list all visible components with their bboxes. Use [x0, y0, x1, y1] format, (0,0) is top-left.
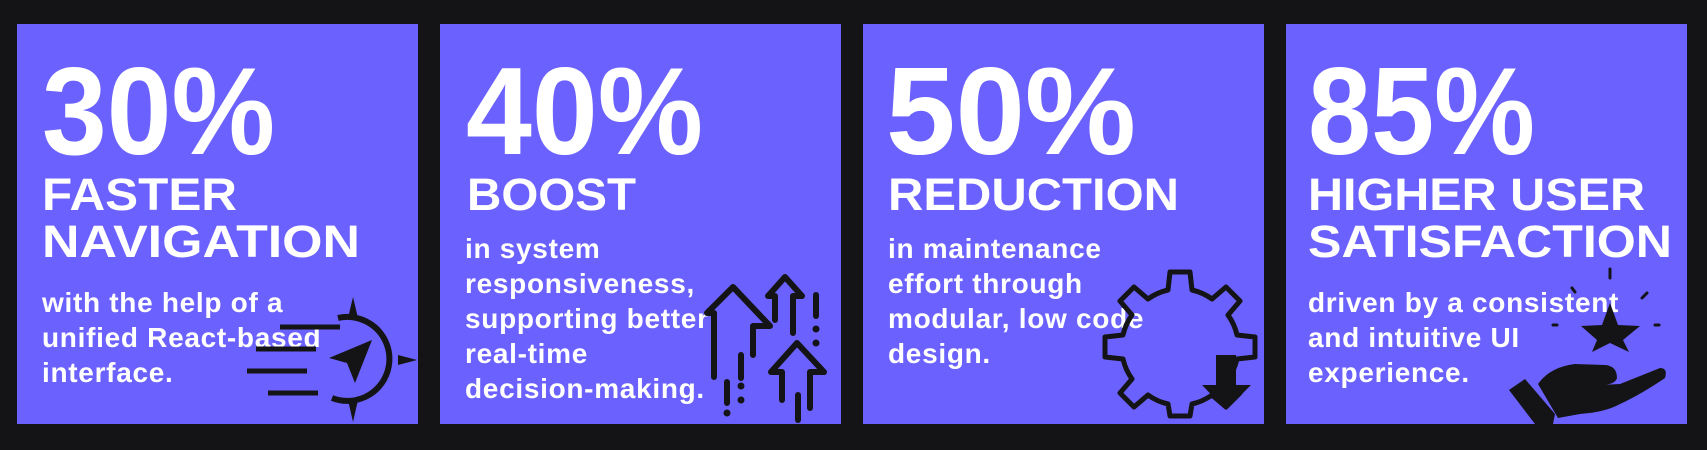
stat number 30%: 30% — [42, 43, 275, 181]
panel: higher user satisfaction — [1286, 24, 1687, 424]
body text: supporting better — [465, 303, 709, 334]
heading: faster navigation — [42, 169, 360, 267]
body text: modular, low code — [888, 303, 1144, 334]
icon: gear with down arrow — [1105, 272, 1255, 416]
icon: compass with speed lines — [247, 297, 417, 422]
heading: faster navigation: NAVIGATION — [42, 216, 360, 267]
body text: interface. — [42, 357, 174, 388]
body text: in maintenance — [888, 233, 1102, 264]
body text: responsiveness, — [465, 268, 695, 299]
body text: unified React-based — [42, 322, 321, 353]
heading: higher user satisfaction: HIGHER USER — [1308, 169, 1645, 220]
body text: design. — [888, 338, 991, 369]
heading: reduction: REDUCTION — [888, 169, 1179, 220]
body text: effort through — [888, 268, 1083, 299]
heading: faster navigation: FASTER — [42, 169, 237, 220]
body text: decision-making. — [465, 373, 705, 404]
stat number 85%: 85% — [1308, 43, 1535, 181]
body text: driven by a consistent — [1308, 287, 1619, 318]
body text: with the help of a — [42, 287, 283, 318]
body text: real-time — [465, 338, 588, 369]
stat number 50%: 50% — [886, 43, 1136, 181]
body text: experience. — [1308, 357, 1470, 388]
panel: boost — [440, 24, 841, 424]
icon: rising arrows — [707, 277, 824, 420]
body text: in system — [465, 233, 600, 264]
heading: higher user satisfaction: SATISFACTION — [1308, 216, 1672, 267]
icon: hand holding star — [1509, 269, 1666, 424]
panel: faster navigation — [17, 24, 418, 424]
heading: boost: BOOST — [467, 169, 636, 220]
body text: and intuitive UI — [1308, 322, 1520, 353]
stat number 40%: 40% — [466, 43, 703, 181]
heading: higher user satisfaction — [1308, 169, 1672, 267]
panel: reduction — [863, 24, 1264, 424]
